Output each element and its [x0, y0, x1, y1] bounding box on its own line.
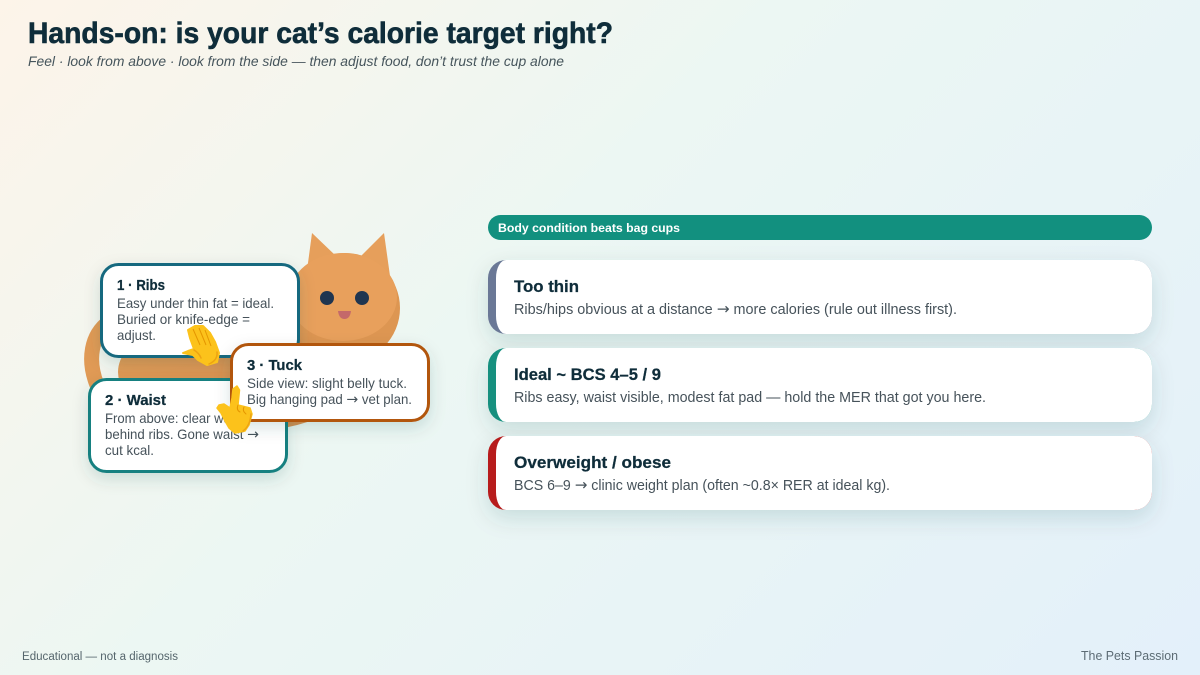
- card: ribs: Easy under thin fat = ideal.: [117, 296, 274, 311]
- panel: overweight: Overweight / obese: [514, 454, 671, 472]
- card: tuck: Side view: slight belly tuck.: [247, 376, 407, 391]
- icon: pointing hand: [217, 386, 252, 433]
- banner: body condition: [488, 215, 1152, 240]
- card: waist: [90, 380, 286, 472]
- title: Hands-on: is your cat’s calorie target right?: [28, 17, 613, 50]
- footer brand: The Pets Passion: [1081, 649, 1178, 663]
- card: tuck: [232, 344, 428, 420]
- banner: body condition: Body condition beats bag cups: [498, 221, 680, 235]
- card: ribs: [102, 264, 298, 356]
- panel: ideal: Ideal ~ BCS 4–5 / 9: [514, 366, 661, 384]
- icon: cat: [92, 233, 400, 432]
- panel: too thin: Ribs/hips obvious at a distance → more calories (rule out illness first).: [514, 300, 957, 318]
- footer note: Educational — not a diagnosis: [22, 651, 178, 663]
- illustration: cat with check cards: [90, 233, 428, 472]
- card: waist: behind ribs. Gone waist →: [105, 427, 259, 443]
- panel: too thin: Too thin: [514, 278, 579, 296]
- card: tuck: Big hanging pad → vet plan.: [247, 392, 412, 408]
- card: waist: From above: clear waist: [105, 411, 244, 426]
- panel: overweight: BCS 6–9 → clinic weight plan (often ~0.8× RER at ideal kg).: [514, 476, 890, 494]
- card: ribs: Buried or knife-edge =: [117, 312, 250, 327]
- card: ribs: 1 · Ribs: [117, 278, 165, 294]
- card: waist: cut kcal.: [105, 443, 154, 458]
- subtitle: Feel · look from above · look from the side — then adjust food, don’t trust the cup alone: [28, 54, 564, 69]
- panel: ideal: [488, 348, 1152, 422]
- card: tuck: 3 · Tuck: [247, 358, 303, 374]
- card: ribs: adjust.: [117, 328, 156, 343]
- icon: open hand: [183, 326, 219, 365]
- card: waist: 2 · Waist: [105, 393, 166, 409]
- panel: overweight: [488, 436, 1152, 510]
- panel: too thin: [488, 260, 1152, 334]
- panel: ideal: Ribs easy, waist visible, modest fat pad — hold the MER that got you here.: [514, 390, 986, 406]
